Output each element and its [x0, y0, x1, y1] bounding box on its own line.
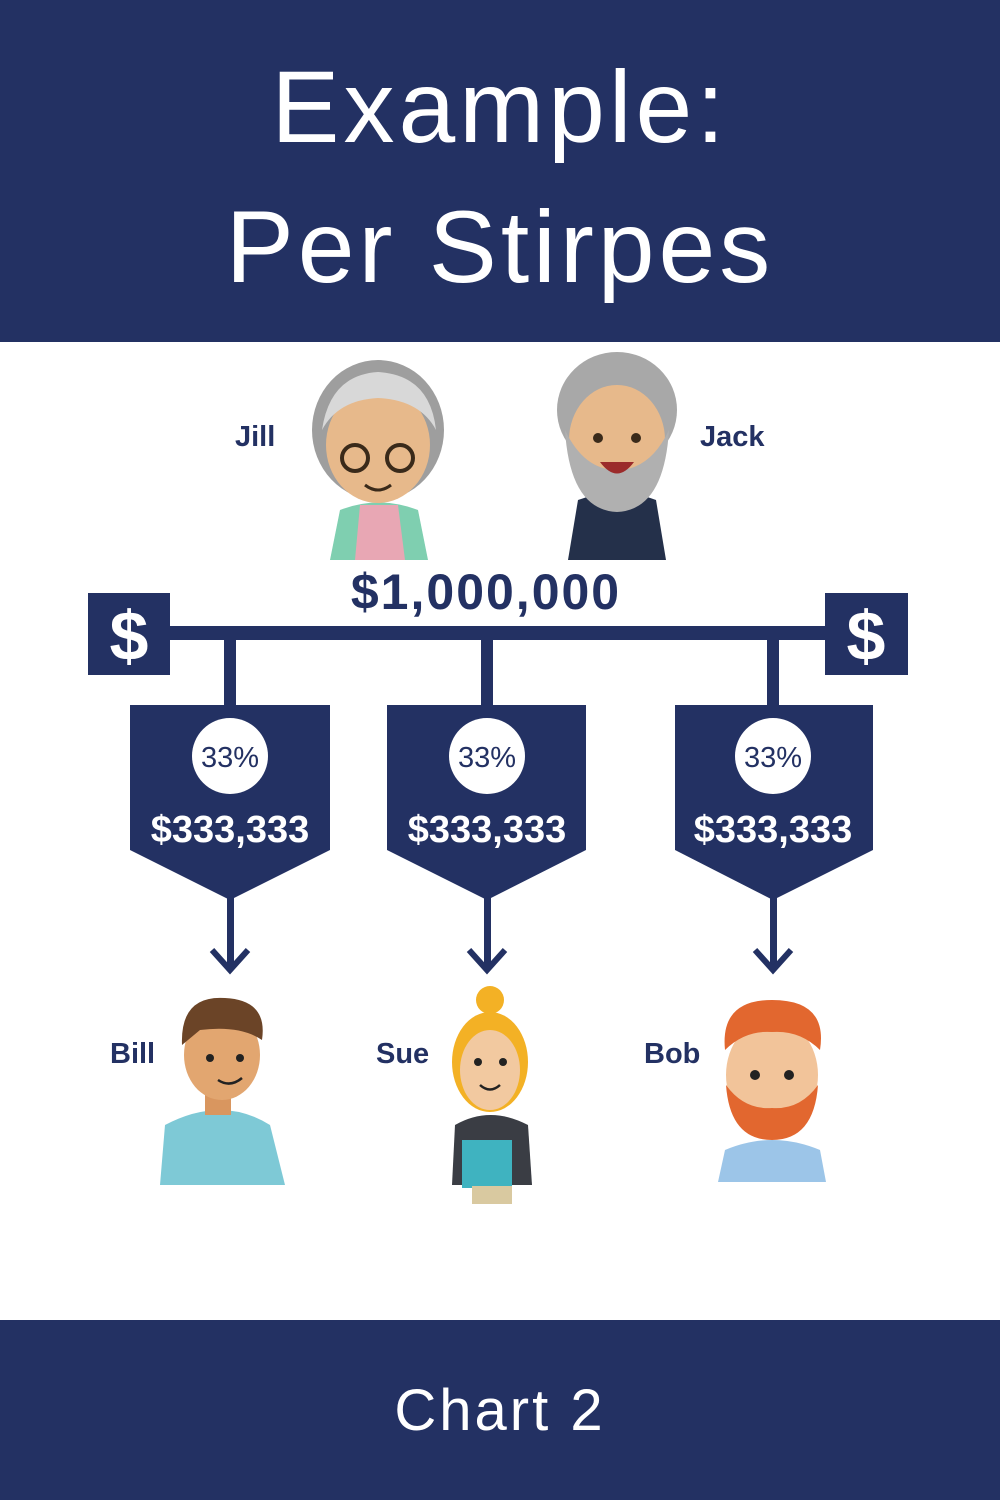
share 2 [387, 640, 586, 970]
label: Bob: Bob [644, 1038, 700, 1070]
share 2: 33% [458, 742, 516, 774]
share 2: $333,333 [408, 809, 566, 851]
share 3: 33% [744, 742, 802, 774]
person: Sue [452, 986, 532, 1204]
title: Example: [271, 50, 729, 164]
person: Bob [718, 1000, 826, 1182]
share 1: 33% [201, 742, 259, 774]
title [0, 0, 1000, 342]
share 1: $333,333 [151, 809, 309, 851]
label: Jack: Jack [700, 421, 765, 453]
label: Sue: Sue [376, 1038, 429, 1070]
horizontal bar [165, 626, 830, 640]
share 3 [675, 640, 873, 970]
footer: Chart 2 [394, 1378, 606, 1443]
footer [0, 1320, 1000, 1500]
share 3: $333,333 [694, 809, 852, 851]
title: Per Stirpes [226, 190, 774, 304]
icon: dollar left: $ [110, 597, 148, 675]
label: Jill: Jill [235, 421, 275, 453]
person: Bill [160, 998, 285, 1185]
icon: dollar right [825, 593, 908, 675]
person: Jill [312, 360, 444, 560]
total amount: $1,000,000 [351, 564, 621, 620]
icon: dollar left [88, 593, 170, 675]
share 1 [130, 640, 330, 970]
icon: dollar right: $ [847, 597, 885, 675]
label: Bill: Bill [110, 1038, 155, 1070]
person: Jack [557, 352, 677, 560]
